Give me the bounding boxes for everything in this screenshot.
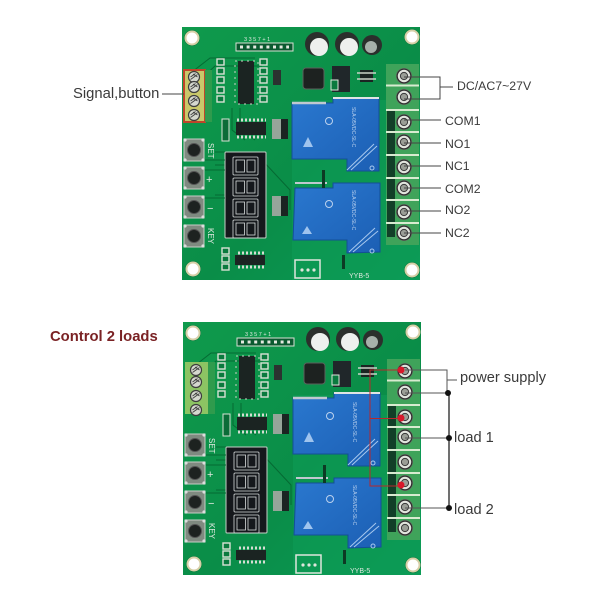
board text: SLA-05VDC-SL-C xyxy=(351,485,357,526)
board text: + xyxy=(206,174,212,186)
label: COM2: COM2 xyxy=(445,182,481,196)
board text: SET xyxy=(206,143,215,159)
label: NC1 xyxy=(404,159,470,173)
label: NO2 xyxy=(404,203,470,217)
board: bottom PCB xyxy=(183,322,421,575)
label: DC/AC7~27V bracket xyxy=(404,77,532,99)
board text: SLA-05VDC-SL-C xyxy=(351,402,357,443)
label: NO1 xyxy=(404,137,470,151)
board text: − xyxy=(207,203,213,215)
label: NO1: NO1 xyxy=(445,137,470,151)
label: Signal,button: Signal,button xyxy=(73,86,159,102)
board text: 3 3 5 7 + 1 xyxy=(244,37,270,43)
common bus line xyxy=(448,393,450,508)
board text xyxy=(207,332,370,575)
board text: SET xyxy=(207,438,216,454)
label: load 1 xyxy=(405,430,494,446)
board text: SLA-05VDC-SL-C xyxy=(350,107,356,148)
board text: KEY xyxy=(207,523,216,540)
label: COM1: COM1 xyxy=(445,114,481,128)
left connector with red highlight xyxy=(184,70,212,122)
label: DC/AC7~27V bracket: DC/AC7~27V xyxy=(457,79,532,93)
label: NC2 xyxy=(404,226,470,240)
board text: SLA-05VDC-SL-C xyxy=(350,190,356,231)
label: COM1 xyxy=(404,114,481,128)
board text: YYB-5 xyxy=(350,568,370,575)
green left connector xyxy=(185,362,215,416)
board text: YYB-5 xyxy=(349,273,369,280)
board text: 3 3 5 7 + 1 xyxy=(245,332,271,338)
board text: KEY xyxy=(206,228,215,245)
heading: Control 2 loads: Control 2 loads xyxy=(50,329,158,345)
label: NC2: NC2 xyxy=(445,226,470,240)
label: NC1: NC1 xyxy=(445,159,470,173)
label: load 2 xyxy=(405,502,494,518)
board text: + xyxy=(207,469,213,481)
label: NO2: NO2 xyxy=(445,203,470,217)
label: power supply wiring: power supply xyxy=(460,370,547,386)
label: load 1: load 1 xyxy=(454,430,494,446)
label: COM2 xyxy=(404,182,481,196)
board text xyxy=(206,37,369,280)
red jumper wiring xyxy=(370,366,404,488)
label: load 2: load 2 xyxy=(454,502,494,518)
board: top PCB xyxy=(182,27,420,280)
label: power supply wiring xyxy=(405,370,547,396)
board text: − xyxy=(208,498,214,510)
